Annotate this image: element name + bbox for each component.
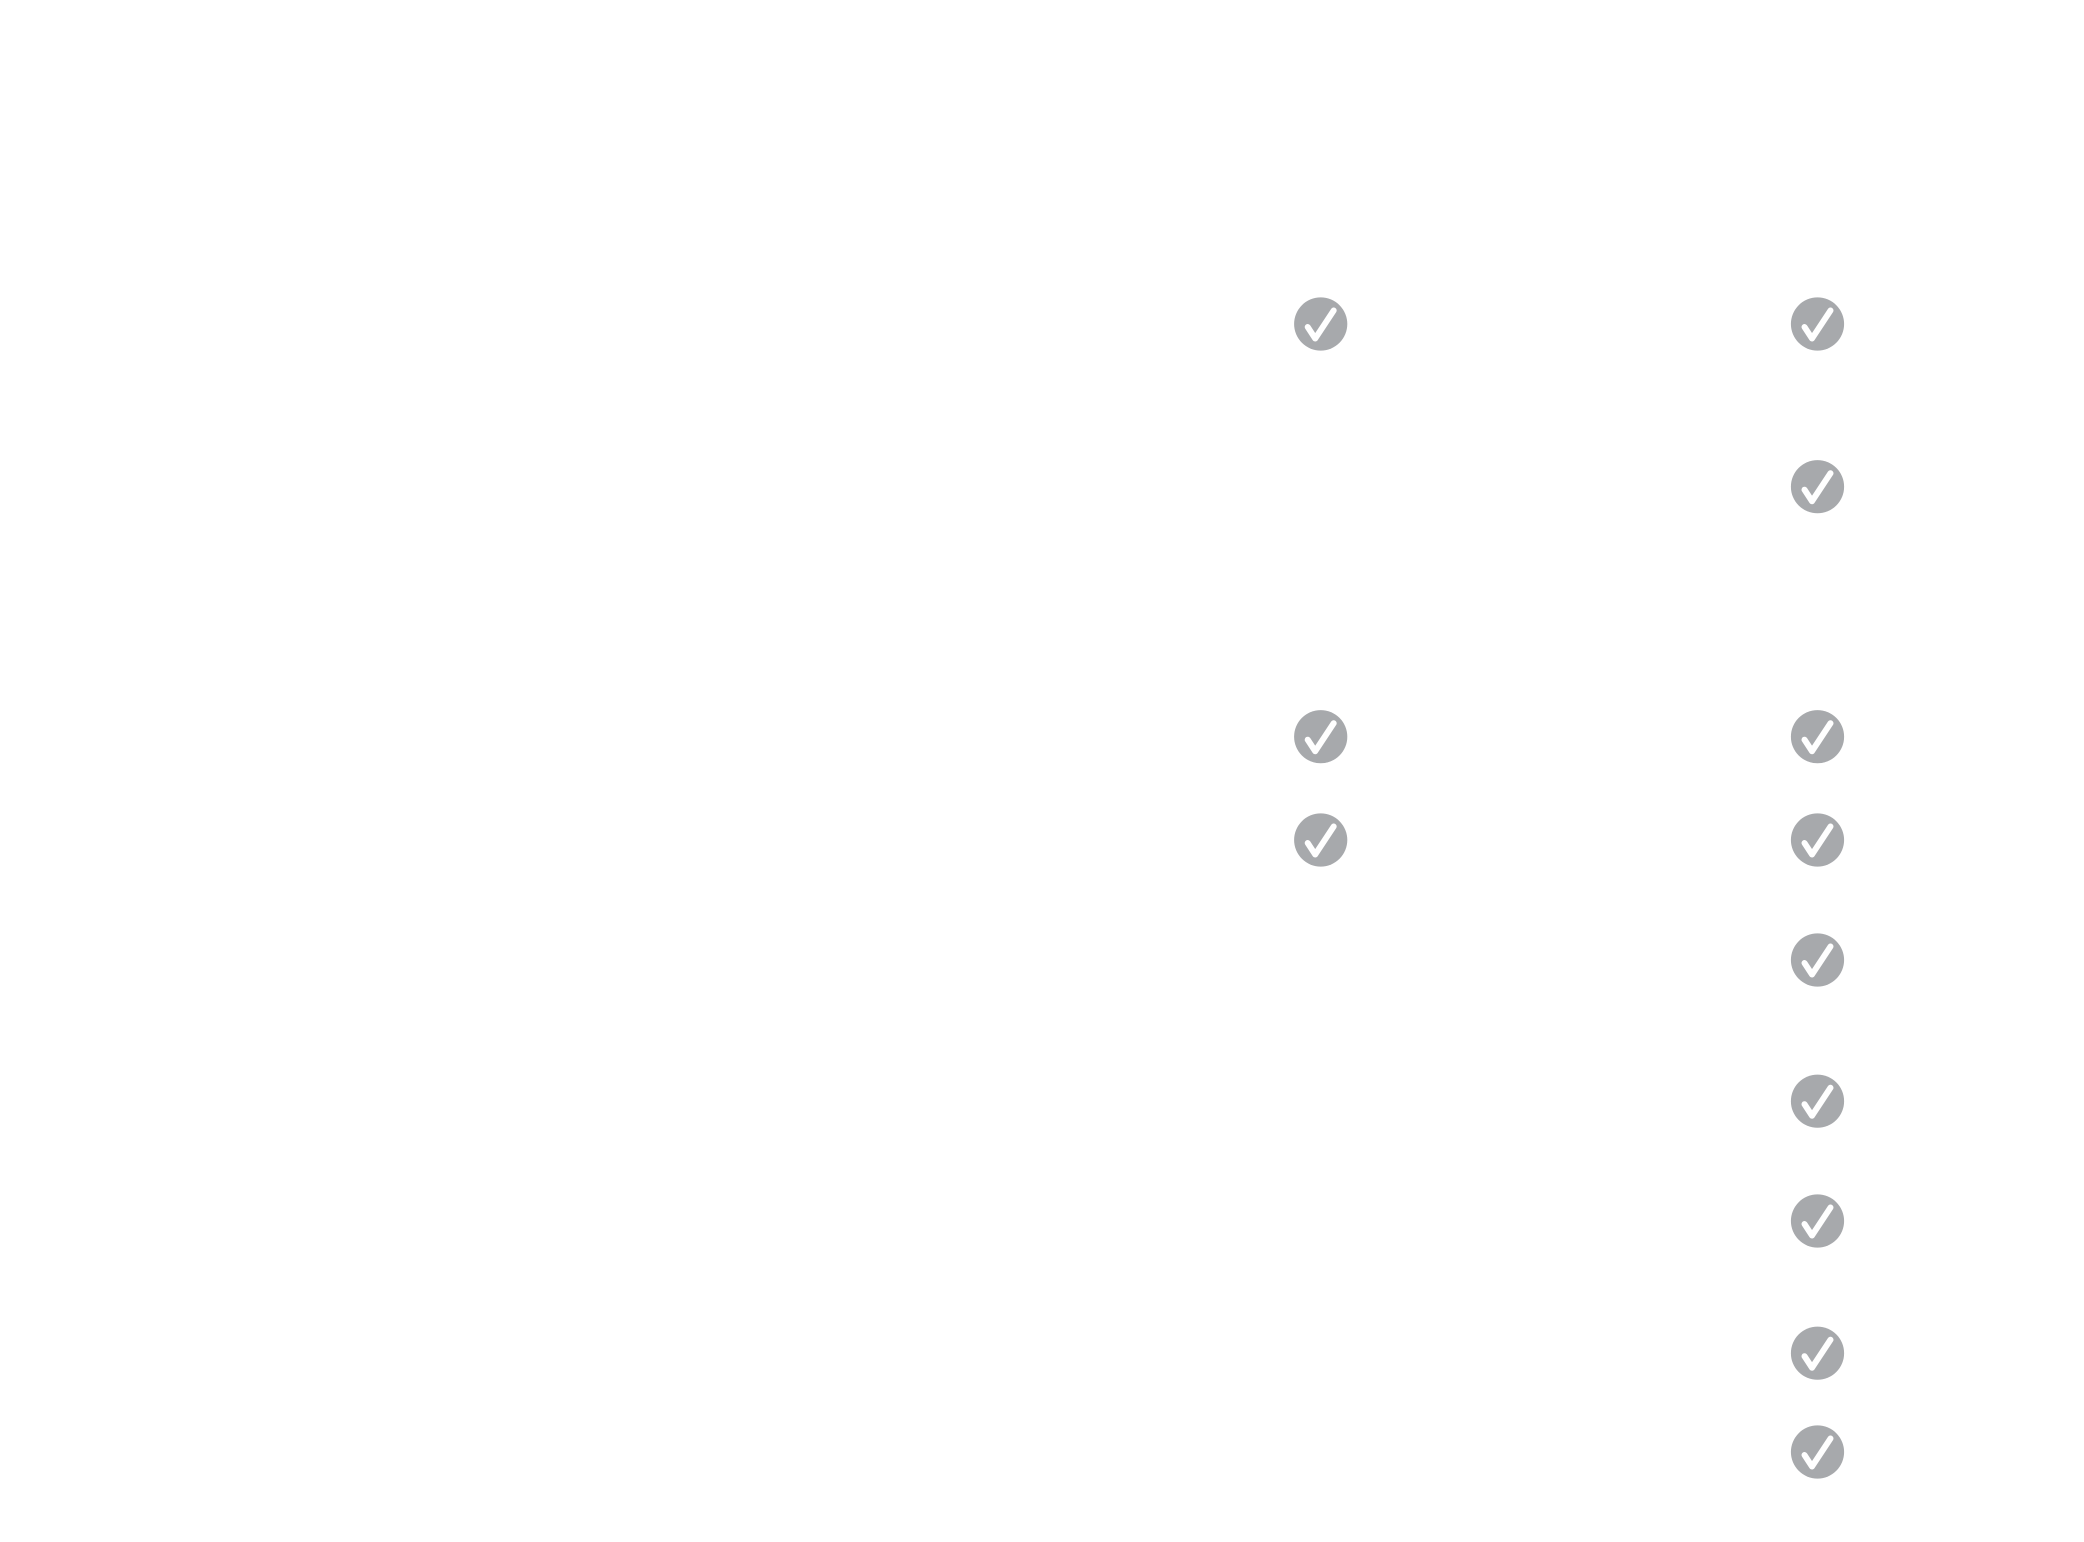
icon: check mark, right column row 7 bbox=[1791, 1194, 1844, 1248]
icon: check mark, right column row 4 bbox=[1791, 813, 1844, 867]
icon: check mark, left column row 2 bbox=[1294, 710, 1347, 763]
icon: check mark, right column row 2 bbox=[1791, 460, 1844, 513]
icon: check mark, right column row 3 bbox=[1791, 710, 1844, 763]
icon: check mark, right column row 9 bbox=[1791, 1425, 1844, 1479]
icon: check mark, right column row 5 bbox=[1791, 933, 1844, 987]
icon: check mark, right column row 1 bbox=[1791, 297, 1844, 351]
icon: check mark, right column row 8 bbox=[1791, 1327, 1844, 1380]
icon: check mark, left column row 1 bbox=[1294, 297, 1347, 351]
icon: check mark, right column row 6 bbox=[1791, 1075, 1844, 1128]
icon: check mark, left column row 3 bbox=[1294, 813, 1347, 867]
